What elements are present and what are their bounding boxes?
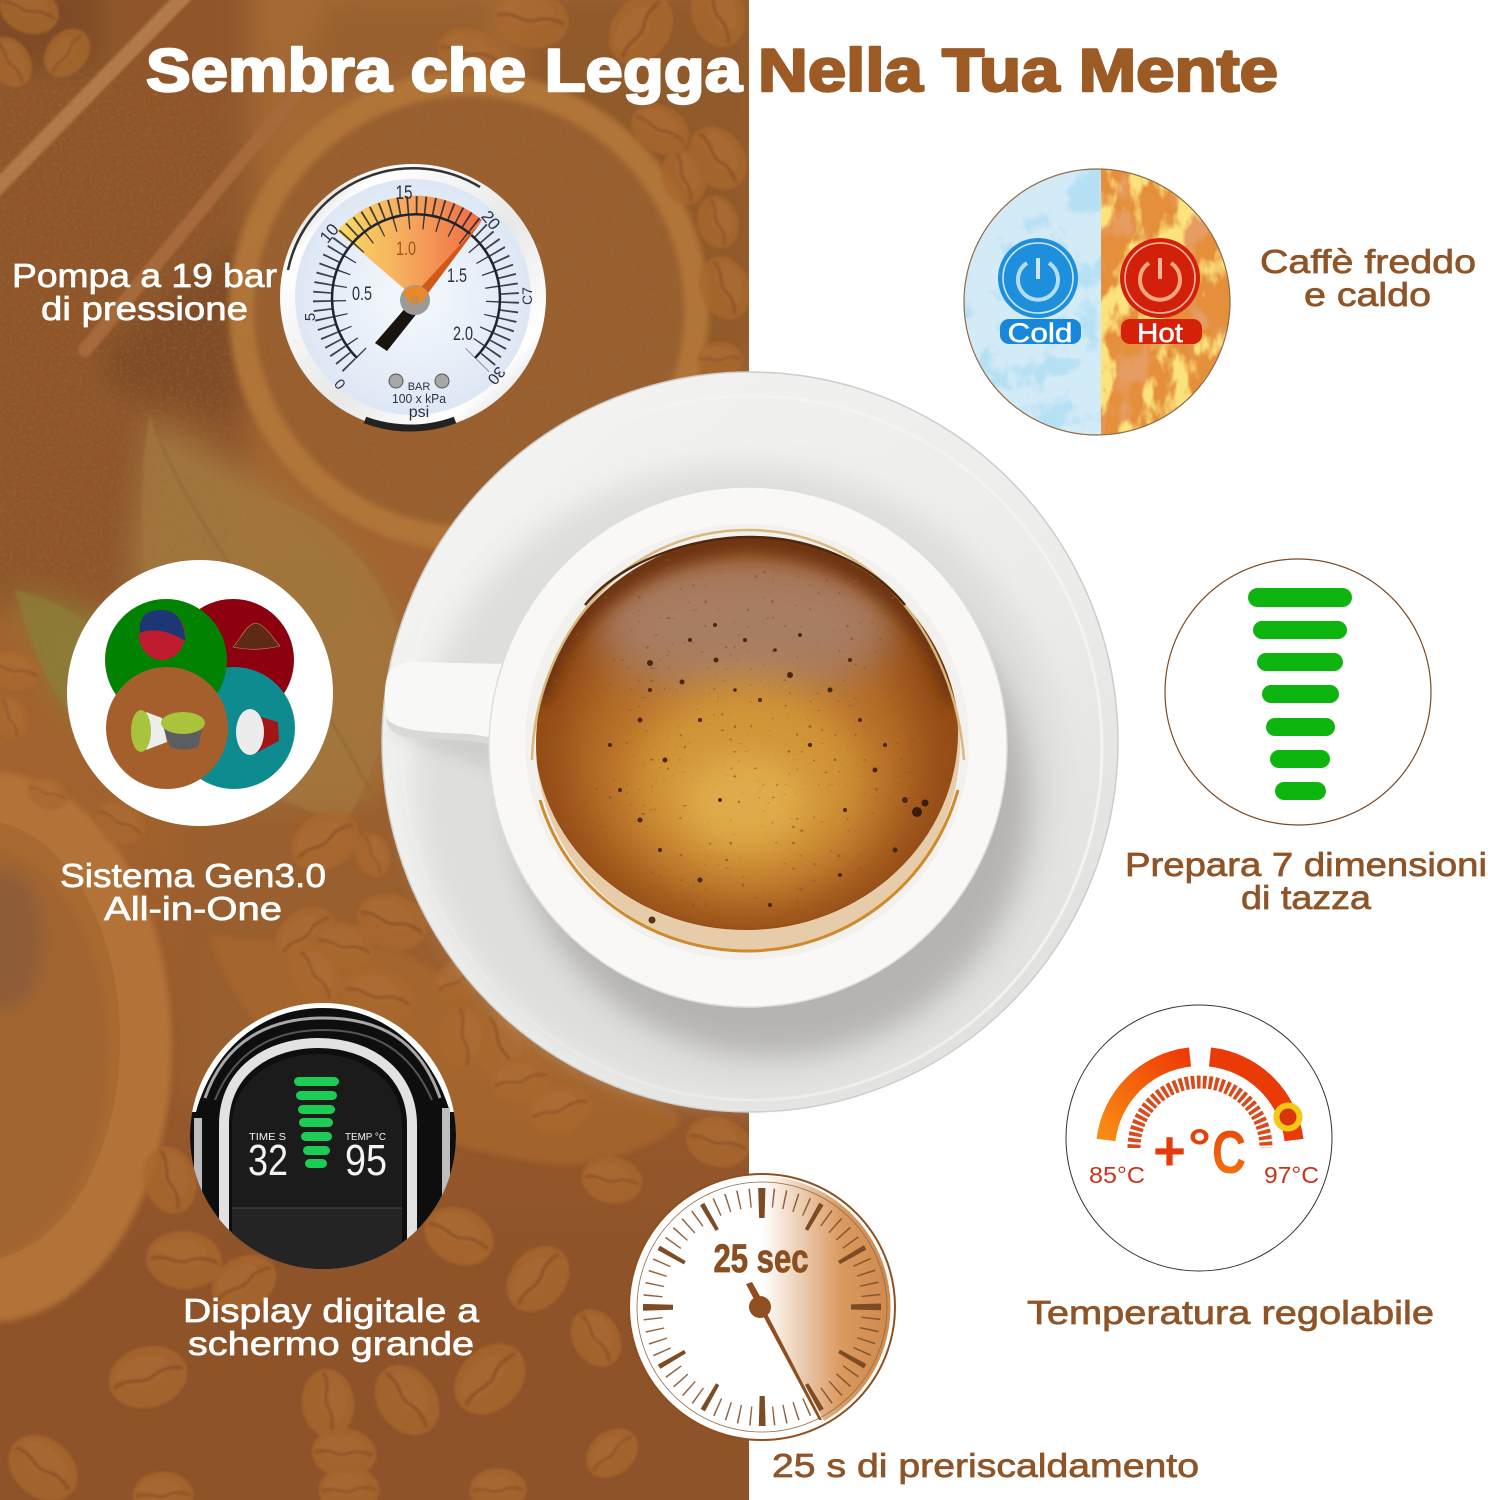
wooden dish under beans (210, 935, 681, 1165)
elapsed sector (762, 1176, 891, 1421)
icon: adjustable temperature: 85°C (1089, 1162, 1145, 1188)
icon: 25 second timer (629, 1174, 895, 1440)
text: preheating label: 25 s di preriscaldamento (772, 1447, 1199, 1484)
icon: 25 second timer: 25 sec (714, 1237, 808, 1281)
icon: seven cup sizes (1165, 559, 1431, 825)
text: all-in-one system label (60, 857, 326, 927)
coffee cup with crema lower left (0, 772, 172, 1322)
title: Sembra che Legga (146, 37, 743, 104)
wooden bowl of ground coffee (229, 71, 709, 551)
gauge numbers: 20 (477, 207, 504, 234)
text: cup sizes label (1125, 846, 1487, 916)
gauge needle (375, 306, 418, 351)
saucer (382, 372, 1118, 1112)
text: display label: Display digitale a (183, 1292, 480, 1329)
lime capsules (131, 710, 205, 752)
red capsule (236, 709, 279, 755)
text: cup sizes label: Prepara 7 dimensioni (1125, 846, 1487, 883)
icon: adjustable temperature: + (1153, 1119, 1186, 1182)
text: cold and hot label: e caldo (1304, 276, 1431, 313)
readouts (249, 1132, 386, 1176)
text: temperature label: Temperatura regolabile (1027, 1294, 1434, 1331)
icon: adjustable temperature: ° (1188, 1119, 1211, 1175)
gauge numbers (302, 183, 535, 421)
cup rim (489, 487, 1007, 1007)
icon: cold and hot (960, 165, 1233, 440)
title: Nella Tua Mente (758, 37, 1278, 104)
text: all-in-one system label: All-in-One (104, 890, 282, 927)
coloured pressure wedge (337, 196, 482, 299)
text: cup sizes label: di tazza (1241, 879, 1372, 916)
gauge numbers: 30 (484, 363, 508, 387)
text: cold and hot label: Caffè freddo (1260, 243, 1476, 280)
readouts: TEMP °C (345, 1131, 386, 1143)
gauge numbers: BAR (408, 381, 430, 393)
text: all-in-one system label: Sistema Gen3.0 (60, 857, 326, 894)
gauge numbers: 2.0 (453, 324, 473, 345)
wooden spoons (0, 0, 295, 350)
cup handle (385, 662, 505, 772)
coffee surface (530, 530, 970, 960)
hot button: Hot (1137, 318, 1184, 348)
crema bubbles (608, 623, 928, 924)
icon: capsule compatibility (67, 560, 333, 826)
gauge numbers: 1.0 (396, 239, 416, 260)
icon: pressure gauge (280, 164, 546, 430)
icon: digital display (190, 1003, 456, 1270)
panel: coffee background left half (0, 0, 760, 1500)
dial ticks (652, 1198, 872, 1416)
pod ball (139, 610, 185, 660)
readouts: 32 (248, 1136, 288, 1185)
ground coffee grain (2, 89, 226, 410)
gauge numbers: 1.5 (447, 266, 467, 287)
gauge numbers: C7 (519, 287, 535, 305)
coffee leaf (15, 415, 400, 825)
text: display label (183, 1292, 480, 1362)
readouts: 95 (345, 1136, 387, 1185)
gauge scale (322, 205, 510, 366)
text: cold and hot label (1260, 243, 1476, 313)
cold button (998, 238, 1081, 348)
coffee beans texture (0, 0, 759, 1500)
coffee powder tray (0, 0, 749, 846)
gauge numbers: 0 (331, 375, 350, 392)
ground coffee (233, 623, 280, 649)
gauge numbers: 0.5 (352, 284, 372, 305)
hot button (1120, 238, 1202, 348)
title (146, 37, 1278, 104)
text: pump pressure label: Pompa a 19 bar (12, 257, 277, 294)
timer hand (746, 1282, 822, 1420)
level bars (294, 1077, 339, 1168)
gauge numbers: 5 (302, 313, 319, 321)
icon: adjustable temperature (1066, 1005, 1332, 1271)
gauge numbers: psi (409, 404, 429, 421)
gauge numbers: 100 x kPa (392, 391, 447, 406)
readouts: TIME S (249, 1131, 286, 1143)
gauge numbers: 10 (316, 220, 343, 247)
icon: adjustable temperature: 97°C (1264, 1162, 1319, 1188)
cold button: Cold (1008, 318, 1072, 348)
icon: coffee cup on saucer (382, 372, 1118, 1112)
text: pump pressure label: di pressione (41, 290, 248, 327)
text: display label: schermo grande (188, 1325, 474, 1362)
text: pump pressure label (12, 257, 277, 327)
icon: adjustable temperature: C (1212, 1119, 1246, 1186)
gauge numbers: 15 (396, 183, 412, 204)
